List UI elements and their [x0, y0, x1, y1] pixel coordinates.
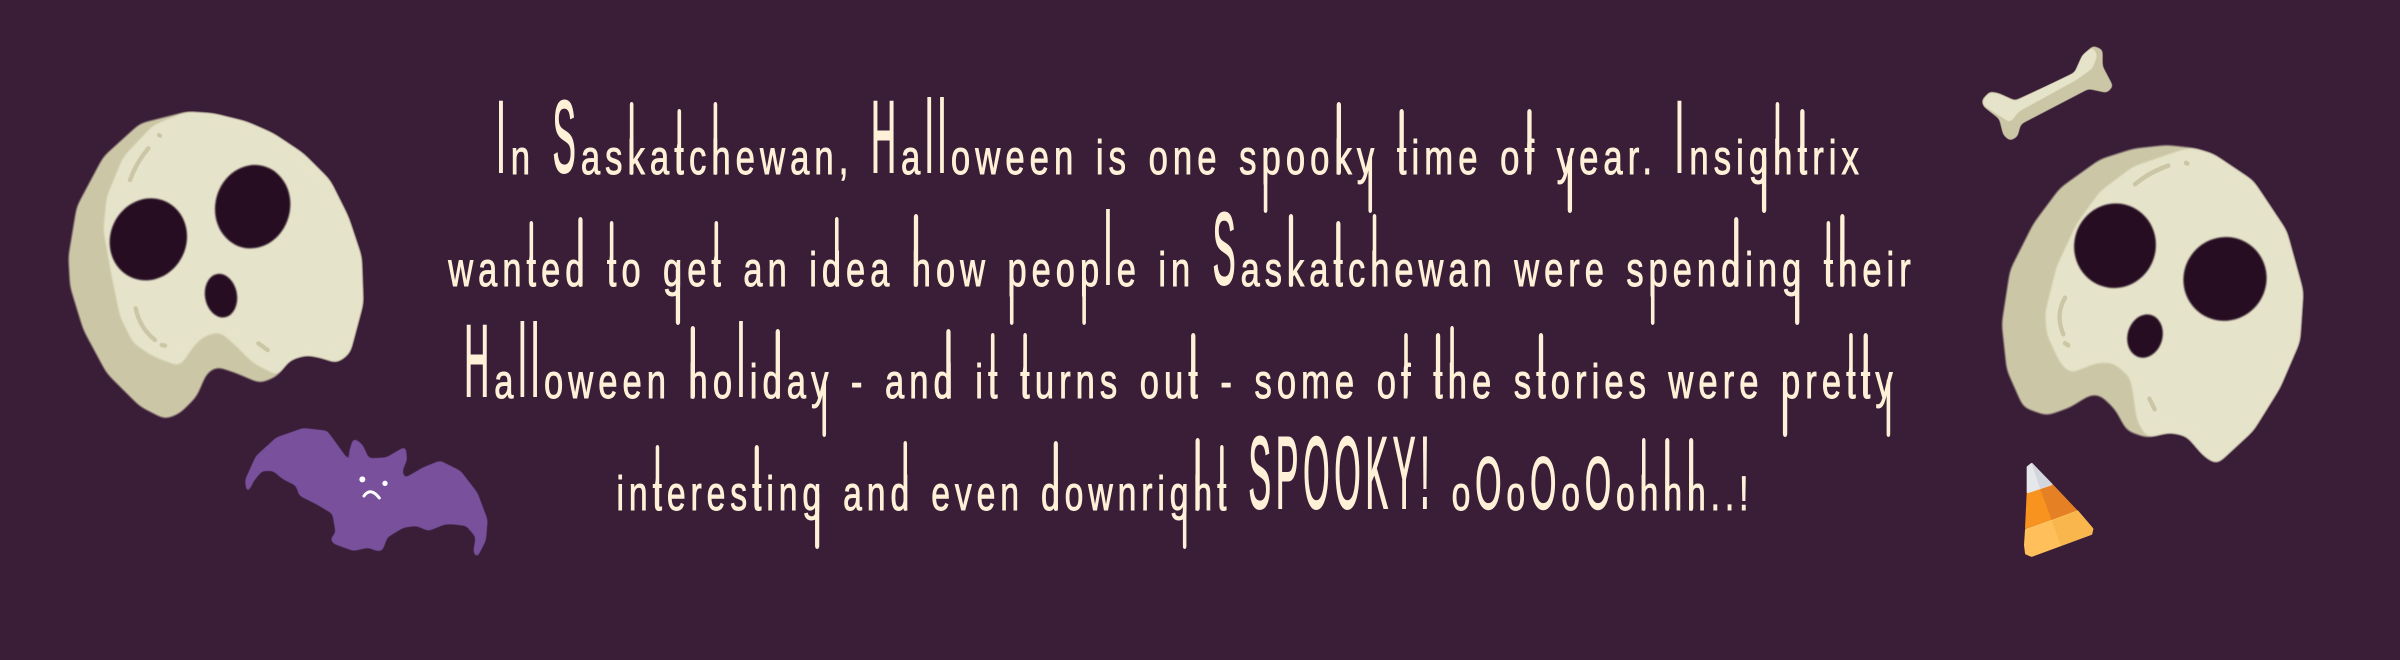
text line 4: O — [1475, 444, 1506, 526]
text line 4: O — [1585, 444, 1616, 526]
icon: right skull — [2002, 145, 2303, 465]
text line 4: P — [1276, 419, 1303, 532]
text line 4: S — [1248, 419, 1276, 532]
text line 1: I — [496, 83, 511, 196]
text line 1: l — [925, 83, 938, 196]
icon: bat — [246, 429, 487, 557]
text line 2: S — [1213, 195, 1241, 308]
text line 4: ! — [1420, 419, 1435, 532]
text line 1: n askatchewan, a oween is one spooky time of year. nsightrix — [511, 132, 1864, 185]
text line 1: S — [553, 83, 581, 196]
text line 1: l — [938, 83, 951, 196]
text line 3: l — [519, 307, 531, 420]
text line 4: O — [1334, 419, 1365, 532]
text line 4: interesting and even downright o o o ohhh..! — [617, 468, 1753, 521]
text line 3: l — [737, 307, 750, 420]
text line 4: O — [1303, 419, 1334, 532]
text line 1: I — [1675, 83, 1689, 196]
text line 3: a oween ho iday - and it turns out - some of the stories were pretty — [494, 356, 1898, 409]
text line 4: Y — [1393, 419, 1420, 532]
icon: left skull — [68, 112, 363, 419]
text line 1: H — [871, 83, 901, 196]
text line 4 — [617, 419, 1753, 549]
text line 1 — [496, 83, 1864, 213]
text line 2: l — [1104, 195, 1117, 308]
icon: candy corn — [2025, 463, 2093, 555]
text line 2 — [448, 195, 1916, 382]
text line 3 — [464, 307, 1898, 437]
text line 3: H — [464, 307, 494, 420]
icon: bone — [1983, 47, 2112, 140]
text line 2: wanted to get an idea how peop e in askatchewan were spending their — [448, 244, 1916, 297]
text line 4: K — [1365, 419, 1393, 532]
text line 4: O — [1530, 444, 1561, 526]
text line 3: l — [531, 307, 544, 420]
